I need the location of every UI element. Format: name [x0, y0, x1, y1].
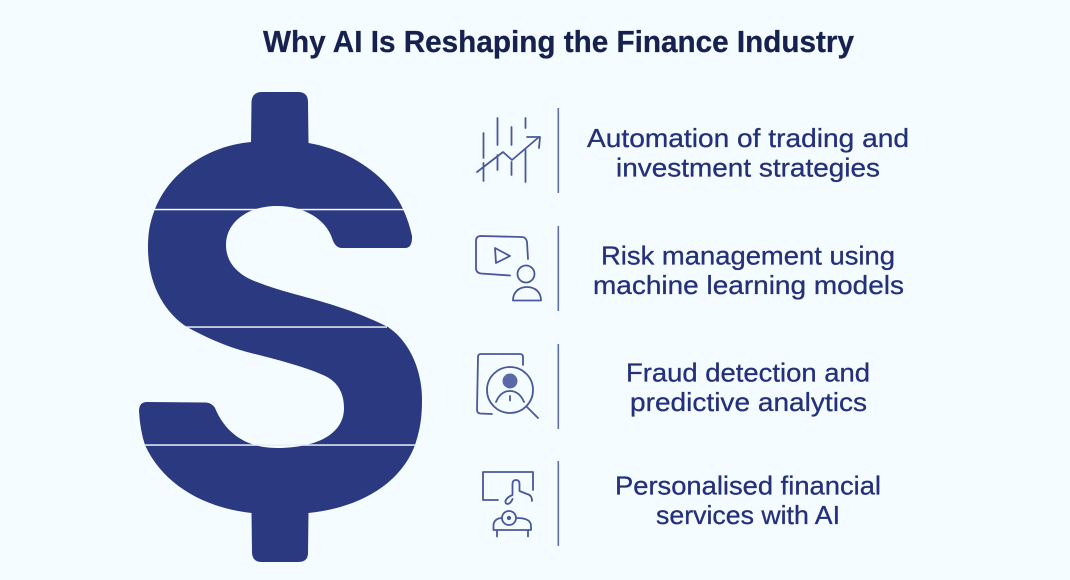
text: fraud detection [626, 358, 870, 417]
icon: trading chart [477, 118, 540, 182]
divider 3 [558, 344, 559, 429]
text: personalised services: Personalised financial [615, 471, 881, 501]
text: automation: Automation of trading and [587, 123, 909, 153]
text: automation: investment strategies [616, 153, 880, 183]
divider 2 [558, 226, 559, 311]
text: fraud detection: predictive analytics [630, 387, 867, 417]
icon: touch screen and user [483, 472, 533, 536]
divider 4 [558, 461, 559, 546]
text: automation [587, 123, 909, 183]
icon: magnifier over person [477, 354, 538, 418]
icon: video and person [476, 236, 541, 300]
text: risk management: Risk management using [601, 241, 895, 271]
text: risk management: machine learning models [593, 270, 904, 300]
text: personalised services [615, 471, 881, 530]
divider 1 [558, 108, 559, 193]
icon: dollar sign [139, 92, 422, 562]
title: Why AI Is Reshaping the Finance Industry [263, 24, 855, 59]
text: risk management [593, 241, 904, 300]
text: personalised services: services with AI [656, 500, 840, 530]
text: fraud detection: Fraud detection and [626, 358, 870, 388]
